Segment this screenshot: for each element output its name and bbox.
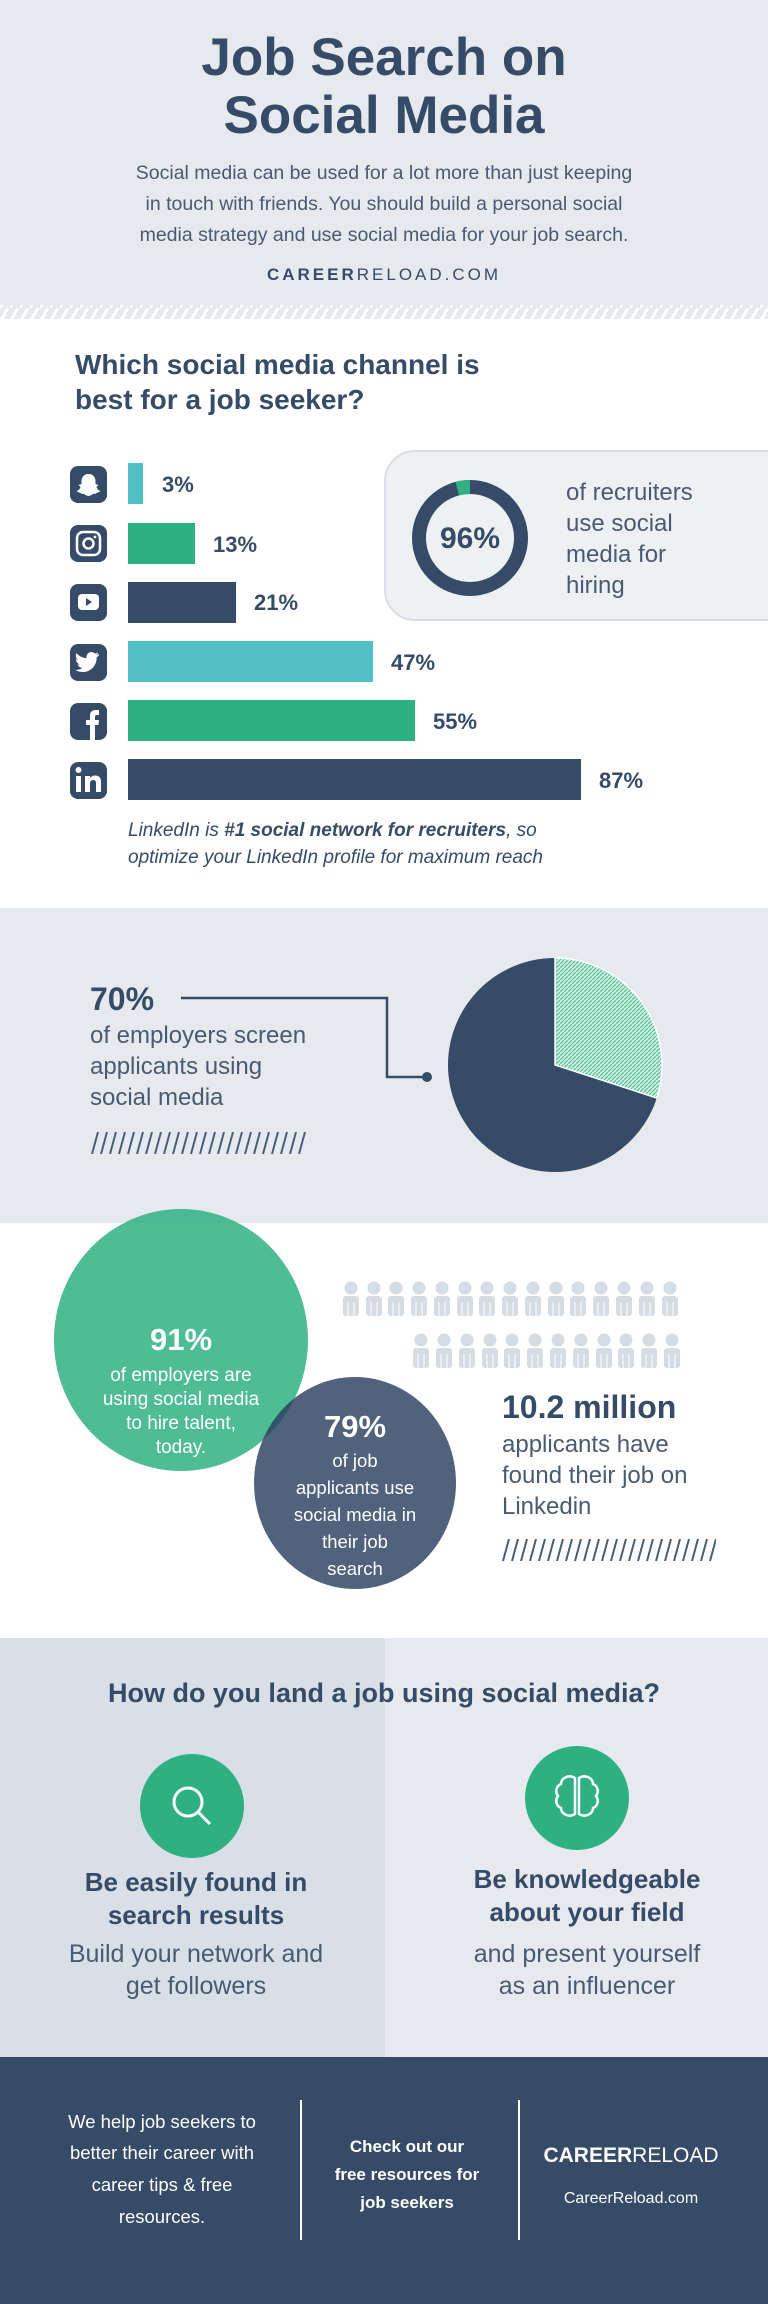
tip 1 text: Be easily found in xyxy=(85,1867,307,1897)
circle: 91%: today. xyxy=(156,1437,206,1458)
circle: 79%: search xyxy=(327,1558,383,1579)
recruiters text: media for xyxy=(566,541,666,568)
footer text middle: free resources for xyxy=(335,2165,480,2184)
stat: 10.2 million xyxy=(502,1389,687,1520)
subtitle: media strategy and use social media for your job search. xyxy=(140,224,628,246)
icon: snapchat xyxy=(70,466,107,503)
title: Social Media xyxy=(223,86,545,145)
tip 2 text: and present yourself xyxy=(474,1940,700,1968)
bar chart xyxy=(70,463,643,800)
linkedin note: LinkedIn is #1 social network for recruiters, so xyxy=(128,820,537,841)
icon: facebook xyxy=(70,703,107,740)
header panel xyxy=(0,0,768,305)
stat text: social media xyxy=(90,1084,224,1111)
circle: 79% xyxy=(254,1377,456,1589)
brand url: CAREERRELOAD.COM xyxy=(267,265,501,284)
linkedin note: optimize your LinkedIn profile for maximum reach xyxy=(128,847,543,868)
bar chart: 47% xyxy=(391,650,435,675)
footer brand xyxy=(543,2144,719,2207)
bar chart: 3% xyxy=(162,472,194,497)
circle: 91%: to hire talent, xyxy=(126,1413,236,1434)
tip 2 text: as an influencer xyxy=(499,1972,675,2000)
footer text middle: job seekers xyxy=(359,2193,454,2212)
icon: linkedin xyxy=(70,762,107,799)
bar chart: 13% xyxy=(213,532,257,557)
heading: which channel: best for a job seeker? xyxy=(75,384,364,415)
title xyxy=(201,28,567,145)
stat text xyxy=(90,981,306,1111)
stat text: of employers screen xyxy=(90,1022,306,1049)
circle: 91%: 91% xyxy=(150,1322,212,1357)
footer brand: CAREERRELOAD xyxy=(543,2144,719,2167)
recruiters text xyxy=(566,479,693,599)
footer brand: CareerReload.com xyxy=(564,2190,698,2207)
panel: 70% employers screen xyxy=(0,908,768,1223)
circle: 79%: 79% xyxy=(324,1409,386,1444)
circle: 79%: social media in xyxy=(294,1504,416,1525)
heading: which channel xyxy=(75,349,480,415)
circle: 91% xyxy=(54,1209,308,1471)
footer text left: better their career with xyxy=(70,2142,254,2163)
panel: how to land a job xyxy=(0,1638,768,2057)
stat: 10.2 million: found their job on xyxy=(502,1462,687,1489)
bar chart: 55% xyxy=(433,709,477,734)
circle: 91%: of employers are xyxy=(110,1365,252,1386)
footer text middle: Check out our xyxy=(350,2137,465,2156)
footer xyxy=(0,2057,768,2304)
footer text left: career tips & free xyxy=(92,2174,232,2195)
subtitle xyxy=(136,162,632,246)
circle: 79%: their job xyxy=(322,1531,388,1552)
stat: 10.2 million: 10.2 million xyxy=(502,1389,676,1425)
tip 1 text: Build your network and xyxy=(69,1940,323,1968)
tip 1 text: get followers xyxy=(126,1972,266,2000)
venn circles xyxy=(54,1209,456,1589)
donut chart xyxy=(419,487,521,589)
footer text left xyxy=(68,2111,256,2227)
circle: 79%: applicants use xyxy=(296,1477,414,1498)
footer text left: resources. xyxy=(119,2206,205,2227)
footer text middle xyxy=(335,2137,480,2212)
bar chart: 87% xyxy=(599,768,643,793)
recruiters text: of recruiters xyxy=(566,479,693,506)
heading: How do you land a job using social media? xyxy=(108,1678,660,1708)
tip 1 text: search results xyxy=(108,1900,284,1930)
recruiters text: use social xyxy=(566,510,673,537)
donut chart: 96% xyxy=(440,522,500,555)
people icons xyxy=(343,1282,680,1368)
circle: 91%: using social media xyxy=(103,1389,260,1410)
icon: search xyxy=(140,1754,244,1858)
pie chart xyxy=(448,958,662,1172)
icon: instagram xyxy=(70,525,107,562)
panel: 96% recruiters xyxy=(385,451,768,620)
connector arrow xyxy=(181,998,432,1082)
icon: twitter xyxy=(70,644,107,681)
subtitle: in touch with friends. You should build a personal social xyxy=(146,193,622,215)
tip 2 text: Be knowledgeable xyxy=(474,1864,700,1894)
tip 1 text xyxy=(69,1867,323,2000)
bar chart: 21% xyxy=(254,590,298,615)
tip 2 text xyxy=(474,1864,700,2000)
linkedin note xyxy=(128,820,543,868)
recruiters text: hiring xyxy=(566,572,625,599)
stat: 10.2 million: applicants have xyxy=(502,1431,669,1458)
tip 2 text: about your field xyxy=(490,1897,684,1927)
stat text: applicants using xyxy=(90,1053,262,1080)
stat text: 70% xyxy=(90,981,154,1017)
icon: brain xyxy=(525,1746,629,1850)
heading: which channel: Which social media channel is xyxy=(75,349,480,380)
circle: 79%: of job xyxy=(332,1450,378,1471)
subtitle: Social media can be used for a lot more than just keeping xyxy=(136,162,632,184)
stat: 10.2 million: Linkedin xyxy=(502,1493,591,1520)
title: Job Search on xyxy=(201,28,567,87)
footer text left: We help job seekers to xyxy=(68,2111,256,2132)
icon: youtube xyxy=(70,584,107,621)
